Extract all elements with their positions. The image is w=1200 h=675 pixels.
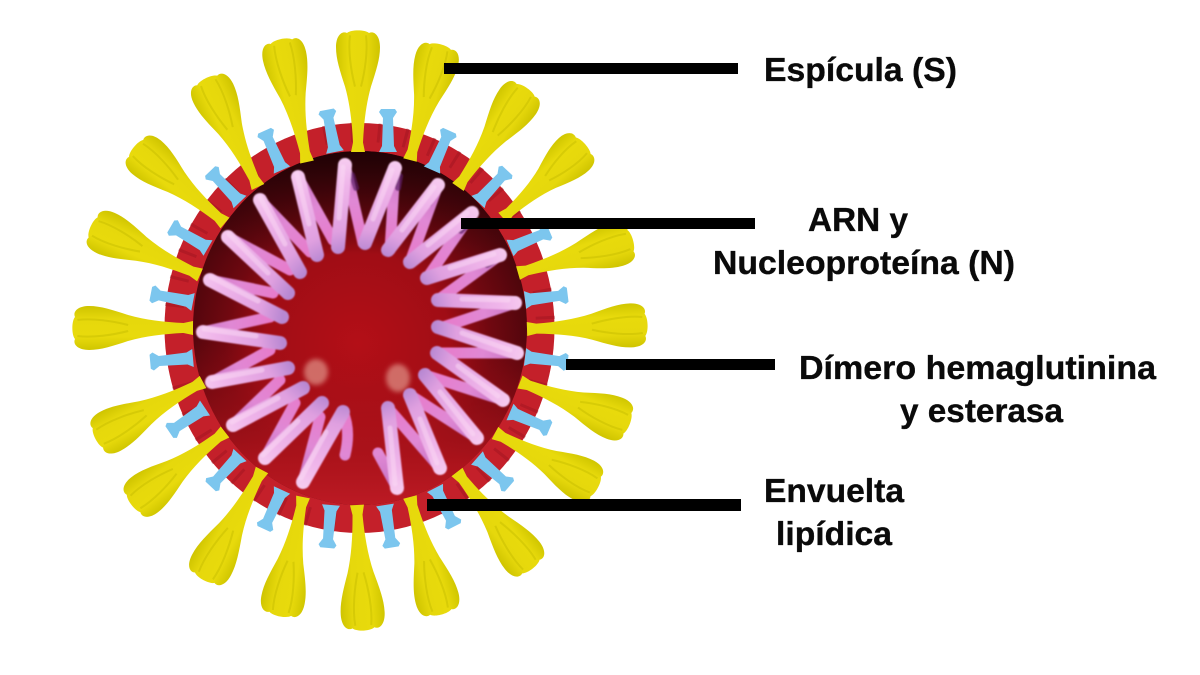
coil front strands bbox=[203, 165, 517, 488]
surface dimers bbox=[149, 108, 569, 549]
RNA coil bbox=[203, 165, 517, 488]
leader line: envelope bbox=[427, 499, 741, 511]
coil peak shading bbox=[352, 175, 494, 265]
leader line: dimer bbox=[566, 359, 775, 370]
label: Envuelta lipídica bbox=[764, 472, 905, 552]
virus interior bbox=[193, 151, 527, 505]
label: ARN y Nucleoproteína (N): Nucleoproteína (N) bbox=[713, 244, 1015, 281]
leader line: spike bbox=[444, 63, 738, 74]
yellow spikes bbox=[72, 30, 648, 632]
coil highlights bbox=[204, 167, 510, 484]
label: Dímero hemaglutinina y esterasa: Dímero hemaglutinina bbox=[799, 349, 1157, 386]
coronavirus diagram bbox=[72, 30, 648, 632]
label: Dímero hemaglutinina y esterasa: y esterasa bbox=[900, 392, 1064, 429]
label: ARN y Nucleoproteína (N) bbox=[713, 201, 1015, 281]
label: Envuelta lipídica: lipídica bbox=[776, 515, 893, 552]
lipid envelope ring bbox=[164, 123, 554, 533]
interior speckles bbox=[304, 359, 410, 392]
label: Dímero hemaglutinina y esterasa bbox=[799, 349, 1157, 429]
leader line: RNA bbox=[461, 218, 755, 229]
label: ARN y Nucleoproteína (N): ARN y bbox=[808, 201, 909, 238]
coil back strands bbox=[203, 165, 517, 488]
label: Envuelta lipídica: Envuelta bbox=[764, 472, 905, 509]
label: Espícula (S): Espícula (S) bbox=[764, 51, 957, 88]
